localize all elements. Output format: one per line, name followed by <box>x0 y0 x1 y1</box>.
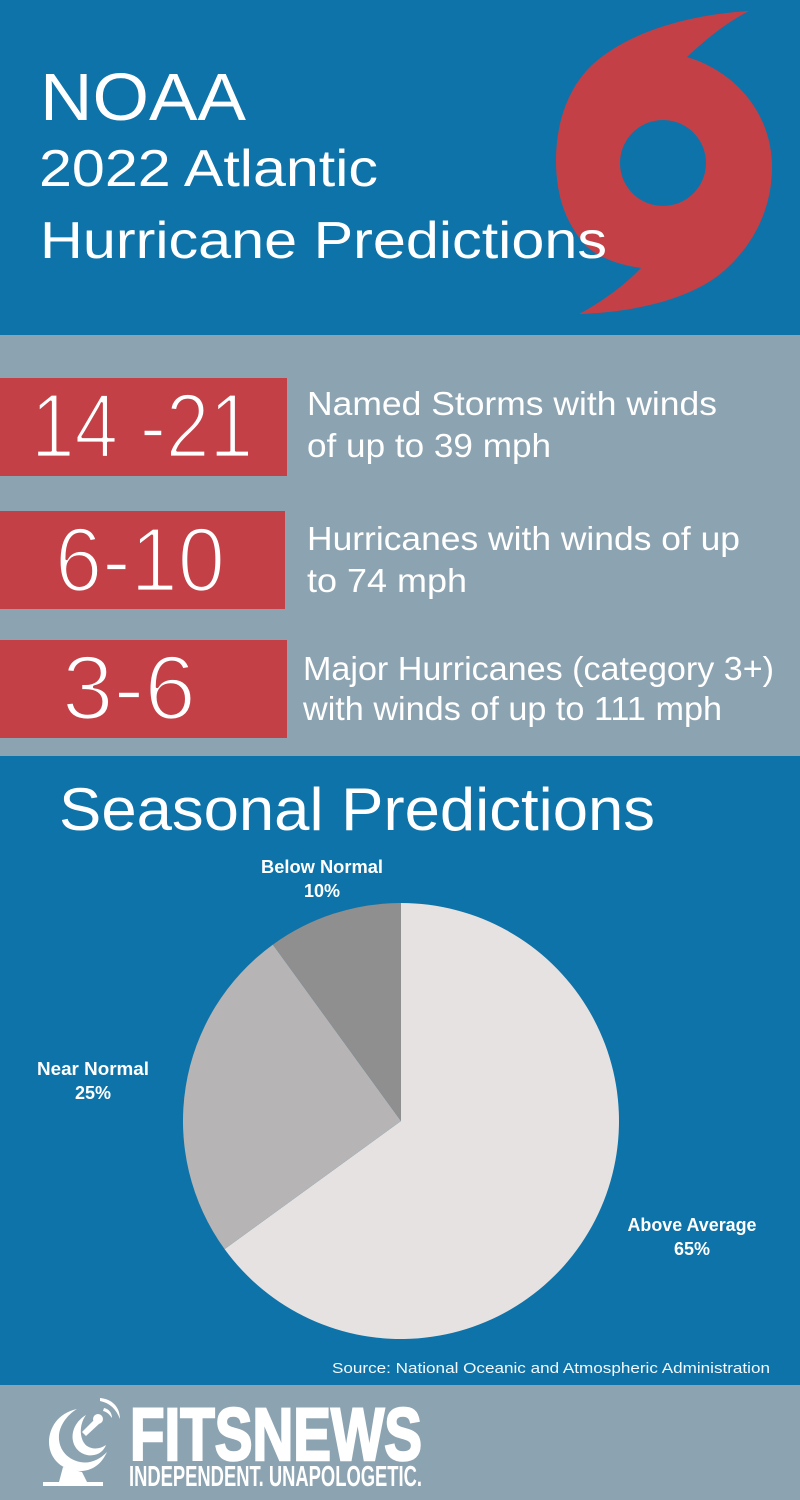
panel: header <box>0 0 800 335</box>
title: 2022 Atlantic: 2022 Atlantic <box>39 140 378 198</box>
pie chart: seasonal predictions <box>37 857 756 1339</box>
source note: Source: National Oceanic and Atmospheric Administration <box>332 1360 770 1377</box>
label: near normal <box>37 1059 149 1103</box>
stat: hurricanes <box>0 510 740 611</box>
title: NOAA: NOAA <box>40 60 246 135</box>
stat: hurricanes: Hurricanes with winds of up <box>307 520 740 557</box>
label: below normal: 10% <box>304 881 340 901</box>
stat: major hurricanes: Major Hurricanes (category 3+) <box>303 650 774 687</box>
stat: major hurricanes: with winds of up to 111 mph <box>302 690 722 727</box>
label: near normal: Near Normal <box>37 1059 149 1079</box>
title: Hurricane Predictions: Hurricane Predictions <box>40 212 607 270</box>
panel: storm counts <box>0 335 800 756</box>
logo tagline: INDEPENDENT. UNAPOLOGETIC. <box>129 1461 422 1493</box>
stat: named storms: 14 -21 <box>31 376 253 477</box>
panel: footer <box>0 1385 800 1500</box>
label: above average <box>628 1215 756 1259</box>
label: below normal <box>261 857 383 901</box>
stat: hurricanes: 6-10 <box>55 510 225 611</box>
stat: named storms <box>0 376 717 477</box>
label: above average: Above Average <box>628 1215 756 1235</box>
icon: hurricane symbol <box>556 11 772 314</box>
label: above average: 65% <box>674 1239 710 1259</box>
logo text: FITSNEWS: FITSNEWS <box>130 1393 422 1476</box>
stat: major hurricanes: 3-6 <box>62 638 196 739</box>
stat: major hurricanes <box>0 638 774 739</box>
heading: Seasonal Predictions: Seasonal Predictions <box>59 776 655 843</box>
stat: named storms: of up to 39 mph <box>307 427 551 464</box>
label: near normal: 25% <box>75 1083 111 1103</box>
label: below normal: Below Normal <box>261 857 383 877</box>
stat: hurricanes: to 74 mph <box>307 562 467 599</box>
stat: named storms: Named Storms with winds <box>307 385 717 422</box>
icon: satellite dish logo <box>43 1398 120 1486</box>
